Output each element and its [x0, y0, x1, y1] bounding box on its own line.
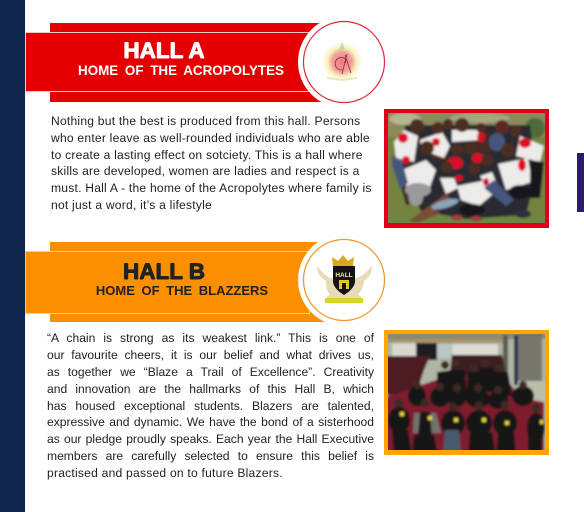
text: Hall B: members are carefully selected to ensure this belief is	[47, 449, 374, 463]
heading B: HALL B	[123, 259, 205, 284]
text: Hall B: practised and passed on to future Blazers.	[47, 466, 283, 480]
text: Hall B: our favourite cheers, it is our belief and what drives us,	[47, 348, 374, 362]
text: Hall A: must. Hall A - the home of the Acropolytes where family is	[51, 181, 372, 195]
heading A: HALL A	[123, 38, 205, 63]
back ribbon A	[50, 23, 325, 102]
text: Hall A	[51, 114, 372, 212]
text: Hall B: as together we “Blaze a Trail of Excellence”. Creativity	[47, 365, 374, 379]
text: Hall B	[47, 331, 374, 480]
emblem B	[298, 238, 386, 322]
sidebar	[0, 0, 25, 512]
back ribbon B	[50, 242, 325, 322]
emblem A	[298, 20, 386, 104]
banner: Hall A	[25, 20, 386, 104]
front ribbon B	[25, 251, 310, 314]
text: Hall B: expressive and dynamic. We have the bond of a sisterhood	[47, 415, 374, 429]
text: Hall B: as our pledge proudly speaks. Each year the Hall Executive	[47, 432, 374, 446]
text: Hall B: and innovation are the hallmarks of this Hall B, which	[47, 382, 374, 396]
text: Hall B: “A chain is strong as its weakest link.” This is one of	[47, 331, 374, 345]
banner: Hall B	[25, 238, 386, 322]
text: Hall A: skills are developed, women are ladies and respect is a	[51, 164, 360, 178]
text: Hall A: Nothing but the best is produced from this hall. Persons	[51, 114, 360, 128]
text: Hall A: not just a word, it’s a lifestyle	[51, 198, 212, 212]
text: Hall A: who enter leave as well-rounded individuals who are able	[51, 131, 370, 145]
photo: Hall B group	[384, 330, 549, 455]
subheading A: HOME OF THE ACROPOLYTES	[78, 63, 284, 78]
shadow	[401, 125, 536, 219]
front ribbon A	[25, 32, 310, 92]
text: Hall A: to create a lasting effect on sotciety. This is a hall where	[51, 148, 363, 162]
purple edge block	[577, 153, 584, 212]
emblem B: HALL	[335, 272, 353, 279]
subheading B: HOME OF THE BLAZZERS	[96, 283, 268, 298]
text: Hall B: has housed exceptional students. Blazers are talented,	[47, 399, 374, 413]
photo: Hall A group	[384, 109, 549, 228]
